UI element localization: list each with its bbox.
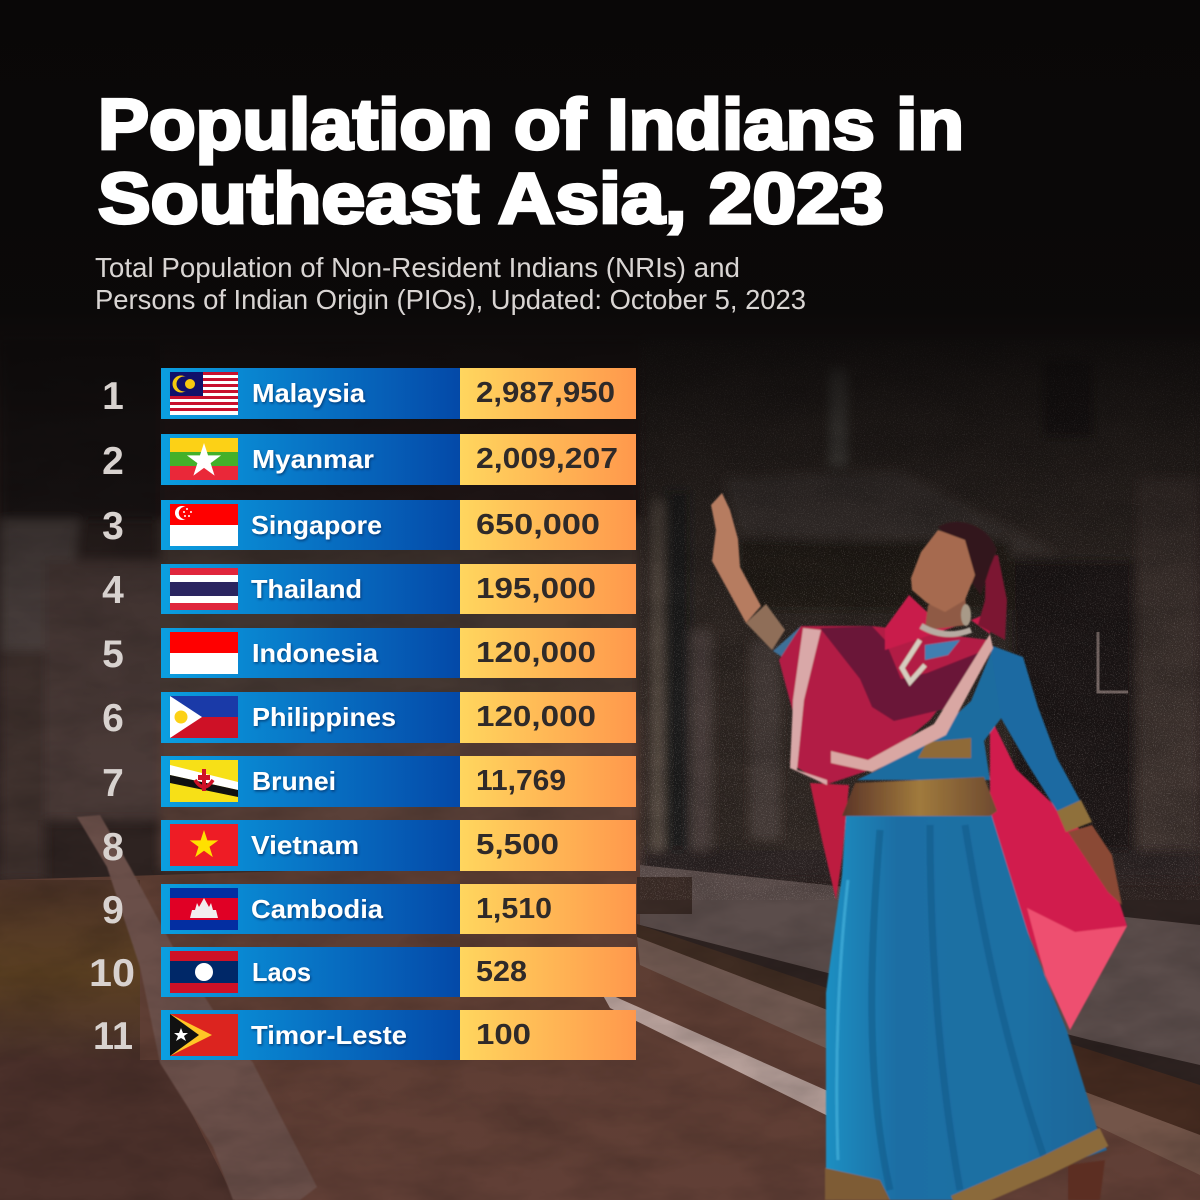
neckline blue (925, 640, 960, 660)
title: Population of Indians in (98, 86, 964, 165)
row: Timor-Leste (93, 1010, 636, 1060)
figure: dancer in blue and crimson (711, 493, 1127, 1200)
row: Timor-Leste: 100 (476, 1019, 531, 1051)
ranking table (89, 368, 636, 1060)
wall outline detail (1098, 632, 1128, 692)
row: Malaysia (102, 368, 636, 419)
mottled shading (0, 340, 1200, 1200)
flag: Philippines (170, 696, 238, 738)
skirt folds (872, 825, 1045, 1190)
peplum band (842, 777, 997, 816)
scarf light lower panel (1027, 908, 1127, 1030)
row: Laos: 10 (89, 952, 135, 995)
necklace (921, 626, 971, 634)
row: Thailand (102, 564, 636, 614)
row: Brunei (102, 756, 636, 807)
right forearm and hand (1068, 825, 1122, 905)
blue upper sleeve (773, 626, 801, 668)
pale road edge right (1040, 1075, 1200, 1175)
veil (978, 555, 1007, 640)
skirt hem left (825, 1168, 890, 1200)
sidewalk right (640, 865, 1200, 1065)
gold waist sash (918, 738, 971, 758)
row: Vietnam: 5,500 (476, 829, 559, 861)
row: Malaysia: Malaysia (252, 378, 366, 408)
subtitle: Persons of Indian Origin (PIOs), Updated: October 5, 2023 (95, 284, 806, 315)
gold sleeve (746, 604, 785, 650)
row: Thailand: 4 (102, 569, 124, 612)
subtitle: Total Population of Non-Resident Indians (NRIs) and (95, 252, 740, 283)
row: Myanmar: Myanmar (252, 444, 374, 474)
row: Thailand: 195,000 (476, 573, 596, 605)
blouse (857, 648, 1005, 780)
row: Malaysia: 1 (102, 375, 124, 418)
scarf trim diagonal (831, 634, 993, 772)
left road darker foreground (0, 1060, 235, 1200)
row: Singapore: 650,000 (476, 509, 600, 541)
scarf trim left (790, 628, 827, 785)
warm left street (0, 880, 140, 1070)
row: Laos: 528 (476, 956, 527, 988)
earring (961, 604, 971, 626)
flag: Indonesia (170, 632, 238, 674)
row: Vietnam: Vietnam (251, 830, 359, 860)
row: Thailand: Thailand (251, 574, 362, 604)
right cuff (1057, 800, 1092, 832)
flag: Laos (170, 951, 238, 993)
row: Vietnam: 8 (102, 826, 124, 869)
road (0, 860, 1200, 1200)
building wall right (640, 340, 1200, 880)
row: Brunei: 11,769 (476, 765, 566, 797)
skirt (826, 810, 1107, 1200)
row: Malaysia: 2,987,950 (476, 377, 615, 409)
row: Vietnam (102, 820, 636, 871)
row: Cambodia (102, 884, 636, 934)
flag: Brunei (170, 760, 238, 802)
row: Philippines: 6 (102, 697, 124, 740)
row: Timor-Leste: Timor-Leste (251, 1020, 407, 1050)
row: Cambodia: 1,510 (476, 893, 552, 925)
row: Singapore: Singapore (251, 510, 382, 540)
flag: Myanmar (170, 438, 238, 480)
row: Indonesia: Indonesia (252, 638, 379, 668)
pale kerb strip (77, 815, 317, 1200)
row: Philippines: 120,000 (476, 701, 596, 733)
feet (1068, 1160, 1105, 1200)
flag: Timor-Leste (170, 1014, 238, 1056)
row: Myanmar: 2,009,207 (476, 443, 618, 475)
curb right (1040, 1034, 1200, 1135)
right flowing scarf (990, 716, 1127, 1030)
row: Cambodia: Cambodia (251, 894, 384, 924)
skirt highlight (837, 880, 848, 1160)
row: Laos (89, 947, 636, 997)
skirt hem gold (955, 1137, 1104, 1200)
flag: Cambodia (170, 888, 238, 930)
lower left scarf (810, 783, 849, 900)
pearls (902, 640, 925, 682)
maroon drape (820, 626, 983, 721)
flag: Singapore (170, 504, 238, 546)
row: Myanmar (102, 434, 636, 485)
flag: Malaysia (170, 372, 238, 415)
row: Laos: Laos (252, 957, 311, 987)
crimson shoulder scarf (779, 626, 990, 785)
row: Philippines (102, 692, 636, 743)
row: Singapore (102, 500, 636, 550)
flag: Thailand (170, 568, 238, 610)
title: Southeast Asia, 2023 (98, 160, 884, 239)
neck and chest (925, 595, 968, 630)
row: Indonesia: 120,000 (476, 637, 596, 669)
row: Indonesia: 5 (102, 633, 124, 676)
left wall and blocks (0, 340, 640, 880)
row: Timor-Leste: 11 (93, 1015, 133, 1058)
speckle texture (640, 340, 1200, 900)
row: Philippines: Philippines (252, 702, 396, 732)
row: Indonesia (102, 628, 636, 678)
title (98, 86, 964, 239)
row: Brunei: 7 (102, 762, 124, 805)
pillar base (637, 877, 692, 914)
curb left (637, 924, 830, 1011)
road line (600, 990, 830, 1117)
pale road edge (637, 937, 830, 1050)
red collar (885, 595, 990, 650)
row: Cambodia: 9 (102, 889, 124, 932)
row: Singapore: 3 (102, 505, 124, 548)
face (911, 530, 975, 612)
flag: Vietnam (170, 824, 238, 866)
row: Myanmar: 2 (102, 440, 124, 483)
subtitle (95, 252, 806, 315)
hair (938, 522, 997, 595)
row: Brunei: Brunei (252, 766, 336, 796)
raised forearm and hand (711, 493, 761, 623)
right arm sleeve (990, 645, 1081, 811)
